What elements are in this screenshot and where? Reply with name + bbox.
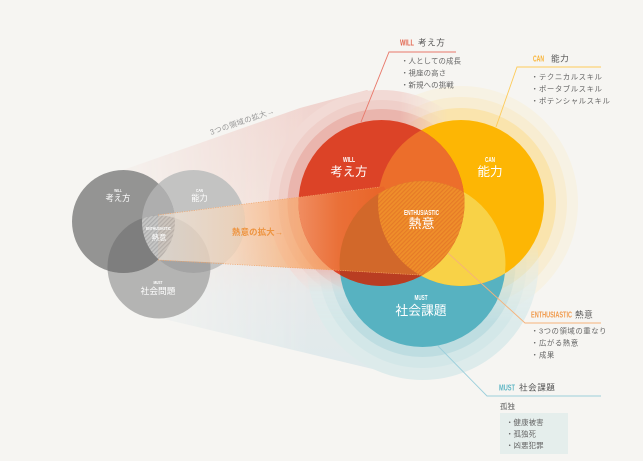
callout: CAN: ・ポテンシャルスキル bbox=[531, 96, 610, 106]
box: isolation list bbox=[500, 413, 568, 454]
callout: MUST: ・健康被害 bbox=[506, 418, 544, 427]
large diagram labels: MUST bbox=[414, 295, 428, 302]
large circle: WILL bbox=[298, 120, 464, 286]
label: enthusiasm expansion: 熱意の拡大→ bbox=[232, 227, 283, 237]
callout: MUST: 孤独 bbox=[500, 402, 516, 411]
callout: ENTHUSIASTIC bbox=[448, 253, 607, 360]
callout: WILL bbox=[361, 36, 462, 122]
dotted band edges bbox=[158, 187, 420, 275]
small diagram labels: ENTHUSIASTIC bbox=[146, 226, 172, 231]
small venn diagram bbox=[72, 170, 250, 318]
callout: CAN: CAN bbox=[533, 54, 544, 64]
large diagram labels: 考え方 bbox=[330, 164, 368, 179]
callout: MUST: ・孤独死 bbox=[506, 430, 537, 438]
small diagram labels: 能力 bbox=[191, 193, 208, 203]
callout: CAN bbox=[496, 52, 610, 127]
band inside WILL circle bbox=[290, 186, 425, 276]
callout: CAN: ・テクニカルスキル bbox=[531, 72, 603, 82]
overlap: WILL and CAN bbox=[380, 130, 464, 192]
small diagram labels: 熱意 bbox=[152, 233, 167, 242]
callout: ENTHUSIASTIC: ・成果 bbox=[531, 350, 555, 360]
large diagram labels: 能力 bbox=[477, 165, 503, 179]
band inside WILL and MUST overlap bbox=[340, 194, 424, 275]
overlap: CAN and MUST bbox=[386, 181, 506, 286]
halo: MUST bbox=[320, 248, 538, 380]
callout: CAN: 能力 bbox=[551, 52, 569, 64]
small diagram labels bbox=[106, 188, 208, 296]
callout: WILL: ・新規への挑戦 bbox=[401, 80, 454, 90]
large circle: MUST bbox=[340, 181, 506, 347]
callout: ENTHUSIASTIC: ENTHUSIASTIC bbox=[531, 310, 572, 320]
callout: CAN: ・ポータブルスキル bbox=[531, 84, 603, 94]
callout: MUST: 社会課題 bbox=[519, 382, 555, 392]
centre overlap: enthusiasm bbox=[378, 181, 464, 276]
halo: CAN bbox=[344, 86, 578, 320]
overlap: WILL and MUST bbox=[340, 181, 464, 286]
small diagram labels: MUST bbox=[154, 280, 163, 285]
enthusiasm expansion band bbox=[158, 187, 420, 275]
callout: ENTHUSIASTIC: 熱意 bbox=[575, 308, 593, 320]
halo: WILL bbox=[272, 90, 438, 288]
small band highlight bbox=[158, 203, 250, 264]
callout: ENTHUSIASTIC: ・3つの領域の重なり bbox=[531, 326, 607, 336]
halo rings around large circles bbox=[268, 86, 578, 380]
large diagram labels: ENTHUSIASTIC bbox=[404, 210, 439, 217]
small diagram labels: 考え方 bbox=[106, 193, 130, 203]
large diagram labels: 熱意 bbox=[408, 216, 435, 231]
small diagram labels: CAN bbox=[196, 188, 203, 193]
callout: WILL: ・人としての成長 bbox=[401, 56, 462, 66]
large diagram labels bbox=[330, 157, 503, 318]
small circle: WILL bbox=[72, 170, 175, 273]
callout: MUST bbox=[438, 346, 601, 454]
large diagram labels: 社会課題 bbox=[395, 303, 447, 318]
callout: WILL: 考え方 bbox=[418, 36, 445, 48]
small circle: MUST bbox=[108, 216, 210, 318]
callout: ENTHUSIASTIC: ・広がる熱意 bbox=[531, 338, 579, 348]
callout: MUST: MUST bbox=[499, 384, 515, 392]
callout: MUST: ・凶悪犯罪 bbox=[506, 441, 544, 450]
callout: WILL: ・視座の高さ bbox=[401, 68, 446, 78]
small diagram labels: 社会問題 bbox=[141, 285, 176, 296]
expansion wedge from small to large diagram bbox=[150, 90, 372, 369]
callout: WILL: WILL bbox=[400, 38, 414, 48]
large circle: CAN bbox=[378, 120, 544, 286]
small circle: CAN bbox=[142, 170, 245, 273]
large diagram labels: CAN bbox=[485, 157, 495, 164]
small diagram labels: WILL bbox=[114, 188, 122, 193]
label: 3 areas expansion: 3つの領域の拡大→ bbox=[208, 105, 276, 137]
large diagram labels: WILL bbox=[343, 157, 356, 164]
